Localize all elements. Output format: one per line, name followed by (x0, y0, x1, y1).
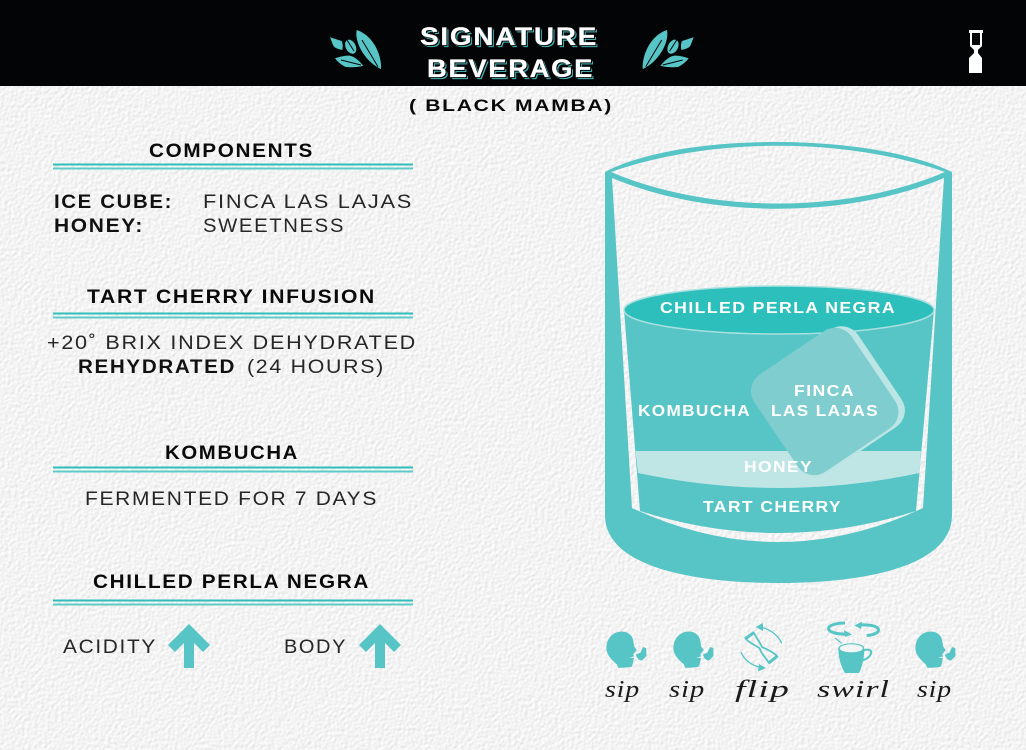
label: sip: sip (669, 677, 705, 703)
heading: components: COMPONENTS (149, 141, 314, 162)
panel: chilled perla negra (53, 572, 413, 668)
step: sip 2 (669, 632, 714, 703)
honey layer (636, 451, 921, 488)
kombucha details: FERMENTED FOR 7 DAYS (85, 489, 378, 510)
chilled perla negra surface (624, 286, 934, 334)
label: finca las lajas: FINCA (794, 383, 855, 400)
heading: chilled perla negra: CHILLED PERLA NEGRA (93, 572, 370, 593)
title: BEVERAGE (427, 55, 594, 83)
label: tart cherry: TART CHERRY (703, 499, 842, 516)
label: swirl: swirl (817, 677, 890, 703)
title (420, 23, 598, 83)
icon: head sipping (915, 632, 956, 668)
label: sip: sip (605, 677, 640, 703)
icon: flipping hourglass (741, 623, 782, 672)
component list: FINCA LAS LAJAS (203, 192, 413, 213)
icon: left leaves (330, 30, 381, 69)
label: finca las lajas: LAS LAJAS (771, 403, 879, 420)
label: kombucha: KOMBUCHA (638, 403, 751, 420)
component list: SWEETNESS (203, 216, 345, 237)
step: swirl (817, 622, 890, 703)
label: flip: flip (735, 677, 790, 703)
label: honey: HONEY (744, 459, 813, 476)
infusion details: (24 HOURS) (247, 357, 385, 378)
label: chilled perla negra: CHILLED PERLA NEGRA (660, 300, 896, 317)
infusion details (47, 333, 417, 378)
icon: hourglass (969, 30, 983, 73)
step: sip 3 (915, 632, 956, 703)
component list: ICE CUBE: (54, 192, 173, 213)
step: flip (735, 623, 790, 703)
label: finca las lajas (771, 383, 879, 420)
body label: BODY (284, 637, 347, 658)
icon: swirling cup (828, 622, 878, 673)
heading: tart cherry infusion: TART CHERRY INFUSION (87, 287, 376, 308)
arrow: body up (359, 624, 401, 668)
infusion details: +20˚ BRIX INDEX DEHYDRATED (47, 333, 417, 354)
subtitle: ( BLACK MAMBA) (409, 96, 613, 115)
icon: head sipping (606, 632, 646, 668)
tasting steps (605, 622, 956, 703)
ice cube (743, 320, 906, 483)
heading: kombucha: KOMBUCHA (165, 443, 299, 464)
label: sip: sip (917, 677, 952, 703)
arrow: acidity up (168, 624, 210, 668)
component list (54, 192, 413, 237)
title: SIGNATURE (420, 23, 598, 51)
panel: components (53, 141, 413, 237)
icon: right leaves (643, 30, 694, 69)
ice cube shadow side (750, 319, 913, 481)
header band (0, 0, 1026, 86)
acidity label: ACIDITY (63, 637, 157, 658)
infusion details: REHYDRATED (78, 357, 236, 378)
step: sip 1 (605, 632, 646, 703)
kombucha liquid (624, 310, 934, 533)
glass illustration (605, 142, 952, 583)
panel: tart cherry infusion (47, 287, 417, 378)
component list: HONEY: (54, 216, 144, 237)
icon: head sipping (673, 632, 714, 668)
glass body (605, 142, 952, 583)
panel: kombucha (53, 443, 413, 510)
